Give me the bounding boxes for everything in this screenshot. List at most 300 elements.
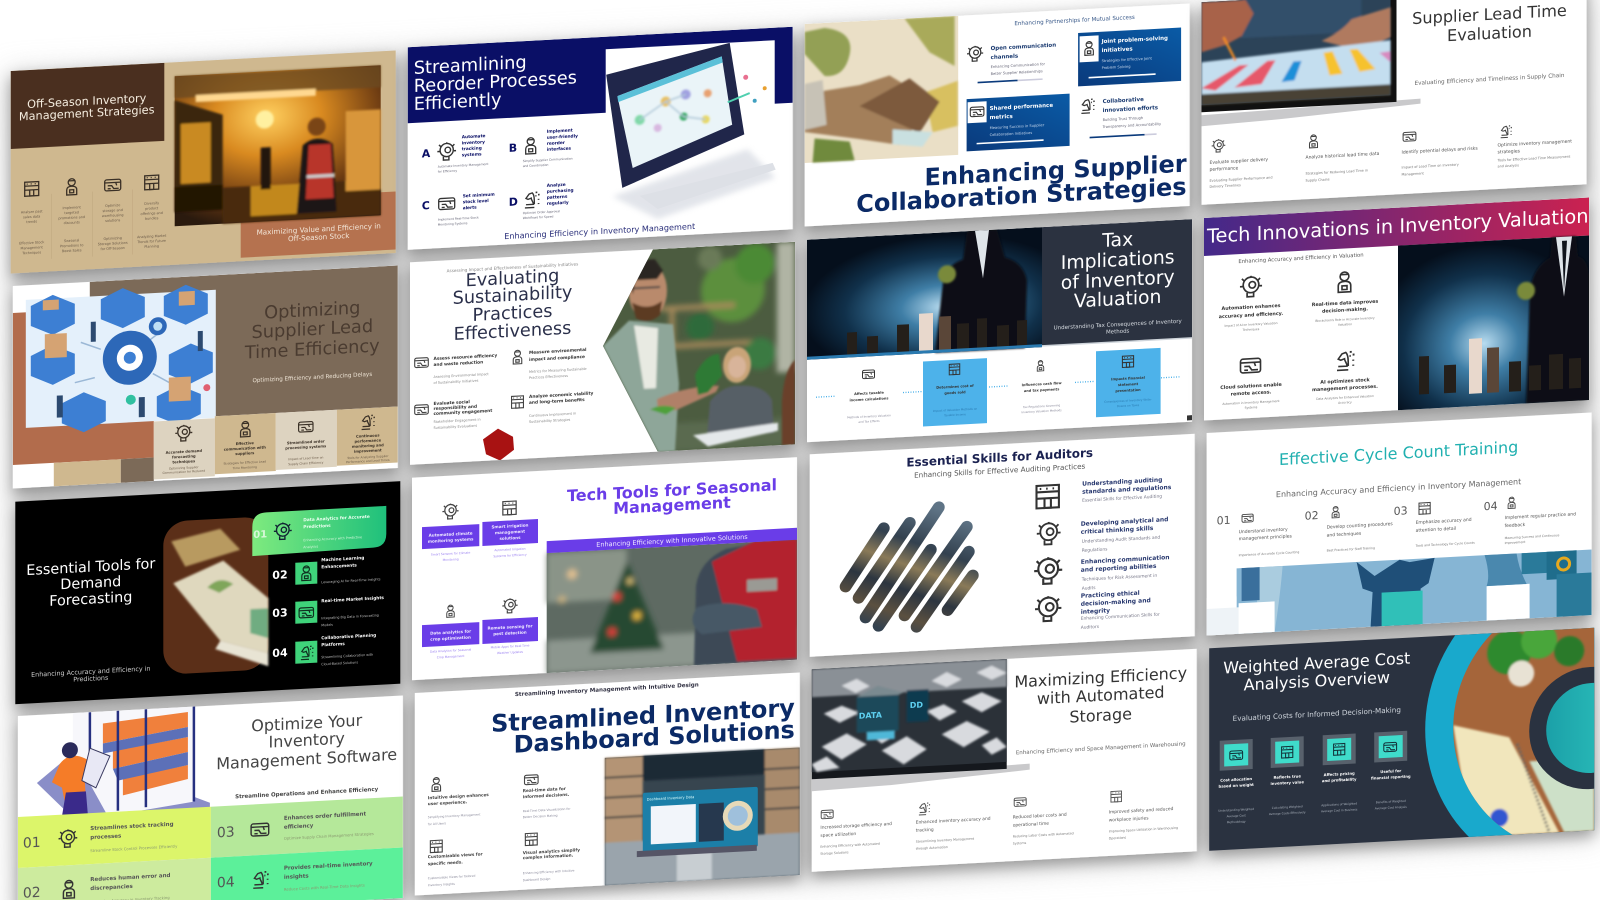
step text: Implement regular practice and <box>1505 511 1576 521</box>
step text: attention to detail <box>1416 526 1456 534</box>
list numbers: 02 <box>272 568 288 582</box>
step captions: Best Practices for Staff Training <box>1327 546 1375 553</box>
green highlight card: Data Analytics for Accurate <box>303 514 370 523</box>
flow captions: Consequences of Inventory Write- <box>1104 397 1152 404</box>
item captions <box>90 831 374 900</box>
laptop data-cube photo <box>812 658 1030 791</box>
panel: auditors skills slide <box>810 434 1195 657</box>
item headings: community engagement <box>434 408 492 417</box>
list numbers <box>272 568 288 660</box>
step numbers: 03 <box>1394 504 1408 518</box>
cards row: processing systems <box>285 444 327 450</box>
item captions: Optimize Supply Chain Management Strategies <box>284 831 374 841</box>
slide backdrop <box>807 219 1192 442</box>
brown header panel <box>90 265 398 423</box>
navy banner <box>408 27 793 123</box>
column captions: Enhancing Efficiency with Automated <box>820 842 880 849</box>
item captions: Blockchain's Role in Accurate Inventory <box>1315 316 1375 323</box>
item headings: Provides real-time inventory <box>284 861 373 872</box>
cards row: Performance and Lead Times <box>346 458 390 464</box>
title: Analysis Overview <box>1244 668 1390 694</box>
column text: Reduced labor costs and <box>1013 812 1067 821</box>
column text: Analyze historical lead time data <box>1305 151 1380 161</box>
panel: automated storage slide <box>812 649 1197 872</box>
item: collaborative innovation: Collaborative <box>1103 97 1144 105</box>
column captions: Management <box>1401 171 1424 177</box>
slide backdrop <box>415 672 800 896</box>
option captions: Monitoring Systems <box>438 221 468 227</box>
title: of Inventory <box>1061 267 1175 294</box>
flow captions: Taxable Income <box>943 412 966 417</box>
column text: tracking <box>916 827 934 834</box>
title: Inventory <box>269 729 345 752</box>
skill captions: Understanding Audit Standards and <box>1082 535 1160 545</box>
option text <box>462 127 578 211</box>
list headings <box>321 554 384 648</box>
blue cards <box>923 348 1161 427</box>
skill captions: Enhancing Communication Skills for <box>1081 612 1160 622</box>
option letters: C <box>422 199 430 213</box>
gradient banner <box>1204 197 1589 256</box>
teal ring <box>1425 554 1600 889</box>
subtitle: Enhancing Accuracy and Efficiency in <box>31 664 150 679</box>
cards row: forecasting <box>172 454 196 460</box>
step icons <box>1242 497 1515 524</box>
column captions: Average Cost <box>1227 813 1247 818</box>
item: open communication <box>967 42 1056 84</box>
column captions <box>1218 799 1407 825</box>
item headings: remote access. <box>1231 389 1272 398</box>
flow text: Affects taxable <box>854 391 884 396</box>
item captions: Assessing Environmental Impact <box>434 372 489 379</box>
step captions <box>1239 533 1560 559</box>
title: Effective Cycle Count Training <box>1279 437 1518 469</box>
tool captions: Monitoring <box>443 557 459 562</box>
rust block <box>13 305 154 465</box>
cards row: Optimizing Supplier <box>169 465 199 471</box>
flow text: Impacts financial <box>1111 376 1145 381</box>
panel: tech innovations slide <box>1204 197 1589 421</box>
option letters: D <box>509 195 518 209</box>
slide content <box>428 677 800 895</box>
cards row: Communication for Reduced <box>162 469 205 475</box>
column text: bundles <box>145 216 159 221</box>
feature icons <box>430 772 538 853</box>
icons <box>59 819 269 899</box>
flow captions: Impact of Valuation Methods on <box>933 407 977 413</box>
slide content <box>807 219 1192 441</box>
subtitle: Off-Season Stock <box>288 231 350 243</box>
tool captions: Crop Management <box>437 654 465 659</box>
column text: Techniques <box>21 250 41 255</box>
slide content <box>26 506 386 686</box>
flow text <box>849 375 1145 407</box>
slide content <box>1218 554 1600 900</box>
skill headings: and reporting abilities <box>1081 563 1157 574</box>
feature headings: Real-time data for <box>523 786 567 793</box>
subtitle: Evaluating Costs for Informed Decision-Making <box>1233 705 1401 723</box>
slide content <box>805 4 1187 221</box>
item captions: Streamline Stock Control Processes Efficiently <box>90 843 178 853</box>
column text: product <box>145 206 159 211</box>
column text: Improved safety and reduced <box>1109 806 1174 815</box>
cards row: performance <box>355 438 382 444</box>
green highlight card: Analytics <box>303 545 319 549</box>
list headings: Collaborative Planning <box>321 632 376 641</box>
cards row: suppliers <box>235 451 255 456</box>
tool labels: crop optimization <box>430 635 471 642</box>
slide backdrop <box>18 695 403 900</box>
item captions: Sustainability Evaluations <box>434 424 477 430</box>
panel: demand forecasting slide <box>15 481 400 704</box>
blue card: shared performance metrics: Shared performance <box>990 103 1053 112</box>
title: Essential Tools for <box>26 556 155 579</box>
item captions: Accuracy <box>1338 400 1352 405</box>
tool captions <box>430 546 530 660</box>
item headings: insights <box>284 873 309 881</box>
column text <box>1210 139 1572 173</box>
panel: cycle count training slide <box>1207 412 1592 636</box>
tool captions: Systems for Efficiency <box>493 553 527 558</box>
corner marker <box>1187 415 1192 420</box>
panel: supplier lead time slide <box>1202 0 1586 205</box>
list numbers: 03 <box>272 606 288 620</box>
cards row: Continuous <box>356 433 380 439</box>
subtitle: Predictions <box>73 674 109 684</box>
slide content <box>13 265 398 489</box>
item captions: Techniques <box>1242 327 1260 332</box>
cards row: Strategies for Effective Lead <box>224 459 266 466</box>
tool labels: solutions <box>499 535 521 541</box>
title: Evaluation <box>1447 22 1532 45</box>
item captions: Continuous Improvement in <box>529 411 576 418</box>
column captions: Supply Chains <box>1305 177 1330 183</box>
subtitle band <box>547 528 797 553</box>
column text: storage and <box>103 208 123 213</box>
warehouse dashboard photo: Dashboard Inventory Data <box>647 795 694 802</box>
feature captions: Inventory Insights <box>428 882 455 887</box>
step numbers: 02 <box>1305 509 1319 523</box>
column captions: Evaluating Supplier Performance and <box>1210 176 1273 183</box>
column text: Trends for Future <box>136 239 166 244</box>
businessman photo <box>1398 235 1589 411</box>
tool captions: Weather Updates <box>497 650 523 655</box>
skill headings: decision-making and <box>1081 597 1151 608</box>
list captions: Leveraging AI for Real-Time Insights <box>321 577 381 584</box>
option captions: Simplify Supplier Communication <box>523 157 573 163</box>
item captions: Sustainability Strategies <box>529 418 571 424</box>
feature captions: Dashboard Design <box>523 877 550 882</box>
option text: systems <box>462 151 482 158</box>
slide backdrop <box>810 434 1195 657</box>
item headings: and waste reduction <box>434 359 483 368</box>
subtitle: Enhancing Accuracy and Efficiency in Valuation <box>1238 252 1364 265</box>
option text: Set minimum <box>463 192 495 199</box>
slide content <box>1207 433 1592 636</box>
tool labels: monitoring systems <box>428 536 474 544</box>
item icons <box>415 350 523 415</box>
feature captions: Enhancing Efficiency with Intuitive <box>523 868 575 875</box>
title: Evaluating <box>466 266 559 291</box>
team illustration <box>1207 549 1592 636</box>
column headings: inventory value <box>1270 779 1304 786</box>
title: Effectiveness <box>454 319 571 345</box>
column text: for Off-Season <box>101 246 125 251</box>
book photo <box>163 516 268 675</box>
list captions: Cloud-Based Solutions <box>321 660 358 666</box>
warehouse dashboard photo <box>605 747 800 886</box>
green highlight card: Enhancing Accuracy with Predictive <box>303 535 362 542</box>
skill captions: Auditors <box>1081 624 1100 631</box>
item captions: Metrics for Measuring Sustainable <box>529 367 587 374</box>
flow captions <box>847 397 1152 425</box>
option text: patterns <box>547 194 568 201</box>
column text: warehousing <box>102 213 124 218</box>
slide content <box>408 27 793 246</box>
feature headings: Visual analytics simplify <box>523 847 580 855</box>
list captions <box>321 577 381 666</box>
step text: feedback <box>1505 522 1526 529</box>
tool labels: Automated climate <box>429 530 473 538</box>
column captions: Streamlining Inventory Management <box>916 837 975 844</box>
column text: Analyze past <box>21 209 43 214</box>
item captions: Stakeholder Engagement in <box>434 418 481 424</box>
item: collaborative innovation <box>1081 95 1162 139</box>
numbers: 04 <box>217 874 235 891</box>
feature captions: Better Decision Making <box>523 813 558 819</box>
feature captions: for All Users <box>428 821 446 826</box>
laptop data-cube photo: DD <box>910 700 923 710</box>
white image area <box>606 40 775 113</box>
option text: user-friendly <box>547 133 578 141</box>
item: open communication: Open communication <box>991 43 1056 52</box>
item headings: Automation enhances <box>1222 303 1281 312</box>
option captions: Workflows for Speed <box>523 215 554 220</box>
warehouse photo <box>175 65 381 226</box>
cards row: Tools for Analyzing Supplier <box>346 454 389 460</box>
item headings: Cloud solutions enable <box>1220 382 1283 391</box>
item headings: accuracy and efficiency. <box>1219 311 1283 320</box>
tool labels: management <box>495 529 525 535</box>
diagonal capsule photo <box>846 506 973 630</box>
item captions: Automation in Inventory Management <box>1222 399 1280 406</box>
column headings: financial reporting <box>1371 774 1411 781</box>
green highlight card: 01 <box>253 529 267 541</box>
cards row: Effective <box>236 441 254 446</box>
column captions: Applications of Weighted <box>1321 801 1357 807</box>
laptop photo <box>1202 0 1420 126</box>
column captions: Methodology <box>1227 819 1246 824</box>
title: Management <box>613 493 731 518</box>
column text: solutions <box>105 218 121 223</box>
slide content <box>1204 197 1589 421</box>
slide backdrop <box>11 50 396 274</box>
step text: Emphasize accuracy and <box>1416 517 1472 526</box>
flow icons <box>862 355 1134 381</box>
column captions: and Analysis <box>1498 163 1519 169</box>
skill captions: Techniques for Risk Assessment in <box>1081 573 1157 583</box>
skill headings: Developing analytical and <box>1081 516 1168 528</box>
column captions: Understanding Weighted <box>1218 807 1254 813</box>
column text: Analyzing Market <box>137 234 167 239</box>
cards row: improvement <box>354 448 382 454</box>
list headings: Platforms <box>321 641 345 648</box>
item headings: Reduces human error and <box>90 873 171 883</box>
flow captions: and Tax Effects <box>858 419 880 424</box>
item captions: Valuation <box>1338 322 1352 327</box>
column text: trends <box>26 220 37 224</box>
item captions <box>434 367 587 430</box>
item headings: responsibility and <box>434 404 477 412</box>
flow text: presentation <box>1115 388 1141 393</box>
column captions: Benefits of Weighted <box>1376 799 1406 804</box>
column text: Optimizing <box>104 236 122 241</box>
blue card: shared performance metrics <box>967 94 1070 151</box>
flow captions: Inventory Valuation Methods <box>1022 408 1062 414</box>
column headings: Reflects true <box>1273 773 1301 780</box>
column text: Management <box>21 245 44 250</box>
dark circle <box>1529 664 1600 792</box>
list numbers: 04 <box>272 646 288 660</box>
option captions <box>438 157 573 227</box>
skill headings: Understanding auditing <box>1082 477 1162 488</box>
item: open communication: channels <box>991 54 1019 61</box>
option text: Automate <box>462 133 486 140</box>
subtitle: Understanding Tax Consequences of Inventory <box>1054 319 1183 332</box>
businessman photo <box>807 227 1042 360</box>
subtitle: Enhancing Efficiency and Space Management in Warehousing <box>1016 741 1186 756</box>
option text: Analyze <box>547 182 566 189</box>
column captions <box>820 826 1178 856</box>
tool labels <box>428 522 532 642</box>
flow dots <box>816 377 1180 397</box>
step captions: Importance of Accurate Cycle Counting <box>1239 550 1299 557</box>
item headings: Real-time data improves <box>1312 299 1378 308</box>
panel: streamlining reorder slide <box>408 27 793 250</box>
icon row <box>821 791 1121 820</box>
column dividers <box>52 189 133 259</box>
option letters: A <box>422 147 431 161</box>
title: Maximizing Efficiency <box>1014 663 1187 691</box>
icon tiles <box>1220 731 1407 771</box>
column text: offerings and <box>141 211 163 216</box>
column text: Seasonal <box>64 238 79 243</box>
column captions: Impact of Lead Time on Inventory <box>1401 163 1459 170</box>
icon row <box>25 174 159 197</box>
slide content <box>422 474 797 680</box>
column text: Boost Sales <box>62 248 82 253</box>
tool icons <box>442 500 518 618</box>
step numbers: 01 <box>1217 514 1231 527</box>
slide content <box>18 690 403 900</box>
column text: sales data <box>23 214 40 219</box>
option captions: and Coordination <box>523 163 549 168</box>
title: Demand <box>60 574 121 593</box>
slide backdrop <box>13 265 398 488</box>
title: with Automated <box>1037 683 1165 708</box>
step text: and techniques <box>1327 531 1362 539</box>
column headings: Useful for <box>1380 768 1401 774</box>
cards row: Streamlined order <box>287 439 325 445</box>
blue card: joint problem-solving: Problem Solving <box>1102 65 1131 70</box>
flow text: goods sold <box>944 390 966 395</box>
list icons <box>295 562 317 664</box>
column captions: Average Cost in Business <box>1321 807 1358 813</box>
feature headings: Intuitive design enhances <box>428 792 489 800</box>
slide backdrop <box>1202 0 1586 205</box>
cards row: Impact of Lead Time on <box>288 455 324 461</box>
flow text: Influences cash flow <box>1022 381 1062 387</box>
column text: Effective Stock <box>19 240 44 246</box>
flow captions: Methods of Inventory Valuation <box>847 413 891 420</box>
tool labels: pest detection <box>493 630 527 636</box>
title: Enhancing Supplier <box>925 150 1187 192</box>
skill headings: integrity <box>1081 607 1110 616</box>
cards row: communication with <box>224 445 266 452</box>
column text <box>820 806 1174 839</box>
cards row: Supply Chain Efficiency <box>288 460 324 466</box>
blue card: shared performance metrics: metrics <box>990 114 1014 121</box>
feature headings <box>428 785 580 866</box>
column headings: Affects pricing <box>1324 771 1355 777</box>
item captions: Systems <box>1245 405 1258 410</box>
column text: strategies <box>1498 148 1521 156</box>
title: Supplier Lead Time <box>1412 1 1567 28</box>
red hexagon <box>483 428 514 461</box>
item headings: discrepancies <box>90 884 134 892</box>
item captions: Impact of AI on Inventory Valuation <box>1225 321 1278 328</box>
list headings: Machine Learning <box>321 555 364 563</box>
item headings: Evaluate social <box>434 399 470 407</box>
title: Collaboration Strategies <box>856 173 1187 218</box>
feature headings: specific needs. <box>428 859 463 866</box>
list captions: Streamlining Collaboration with <box>321 653 373 659</box>
feature captions <box>428 806 575 887</box>
column text: Enhanced inventory accuracy and <box>916 816 991 826</box>
handshake photo <box>805 16 958 163</box>
item headings: Measure environmental <box>529 347 587 356</box>
item headings: AI optimizes stock <box>1320 377 1371 386</box>
rust caption panel <box>241 191 396 258</box>
column text <box>19 201 167 256</box>
slide backdrop <box>1207 412 1592 636</box>
colour blocks <box>18 796 403 900</box>
slide backdrop <box>1209 628 1594 851</box>
feature captions: Customizable Views for Tailored <box>428 874 475 880</box>
skill icons <box>1034 485 1062 622</box>
title panel <box>1042 219 1192 346</box>
title: Efficiently <box>414 89 502 115</box>
skill headings: Enhancing communication <box>1081 554 1170 566</box>
title: Optimizing <box>264 297 360 324</box>
option text: interfaces <box>547 146 572 153</box>
title: Tech Innovations in Inventory Valuation <box>1206 205 1589 248</box>
panel: supplier collaboration slide <box>805 3 1190 227</box>
subtitle: Streamline Operations and Enhance Efficiency <box>235 787 379 800</box>
skill headings: Practicing ethical <box>1081 590 1140 600</box>
step text: Develop counting procedures <box>1327 521 1393 531</box>
cards row: techniques <box>172 459 196 464</box>
column captions: Average Costs Effectively <box>1269 810 1306 816</box>
column text: space utilization <box>820 831 856 839</box>
icon row <box>1212 124 1512 153</box>
title: Sustainability <box>453 283 572 309</box>
skill captions: Audits <box>1082 585 1096 592</box>
title: Off-Season Inventory <box>27 92 147 111</box>
list headings: Real-time Market Insights <box>321 595 384 604</box>
title panel <box>11 63 164 149</box>
title: Streamlining <box>414 52 527 79</box>
